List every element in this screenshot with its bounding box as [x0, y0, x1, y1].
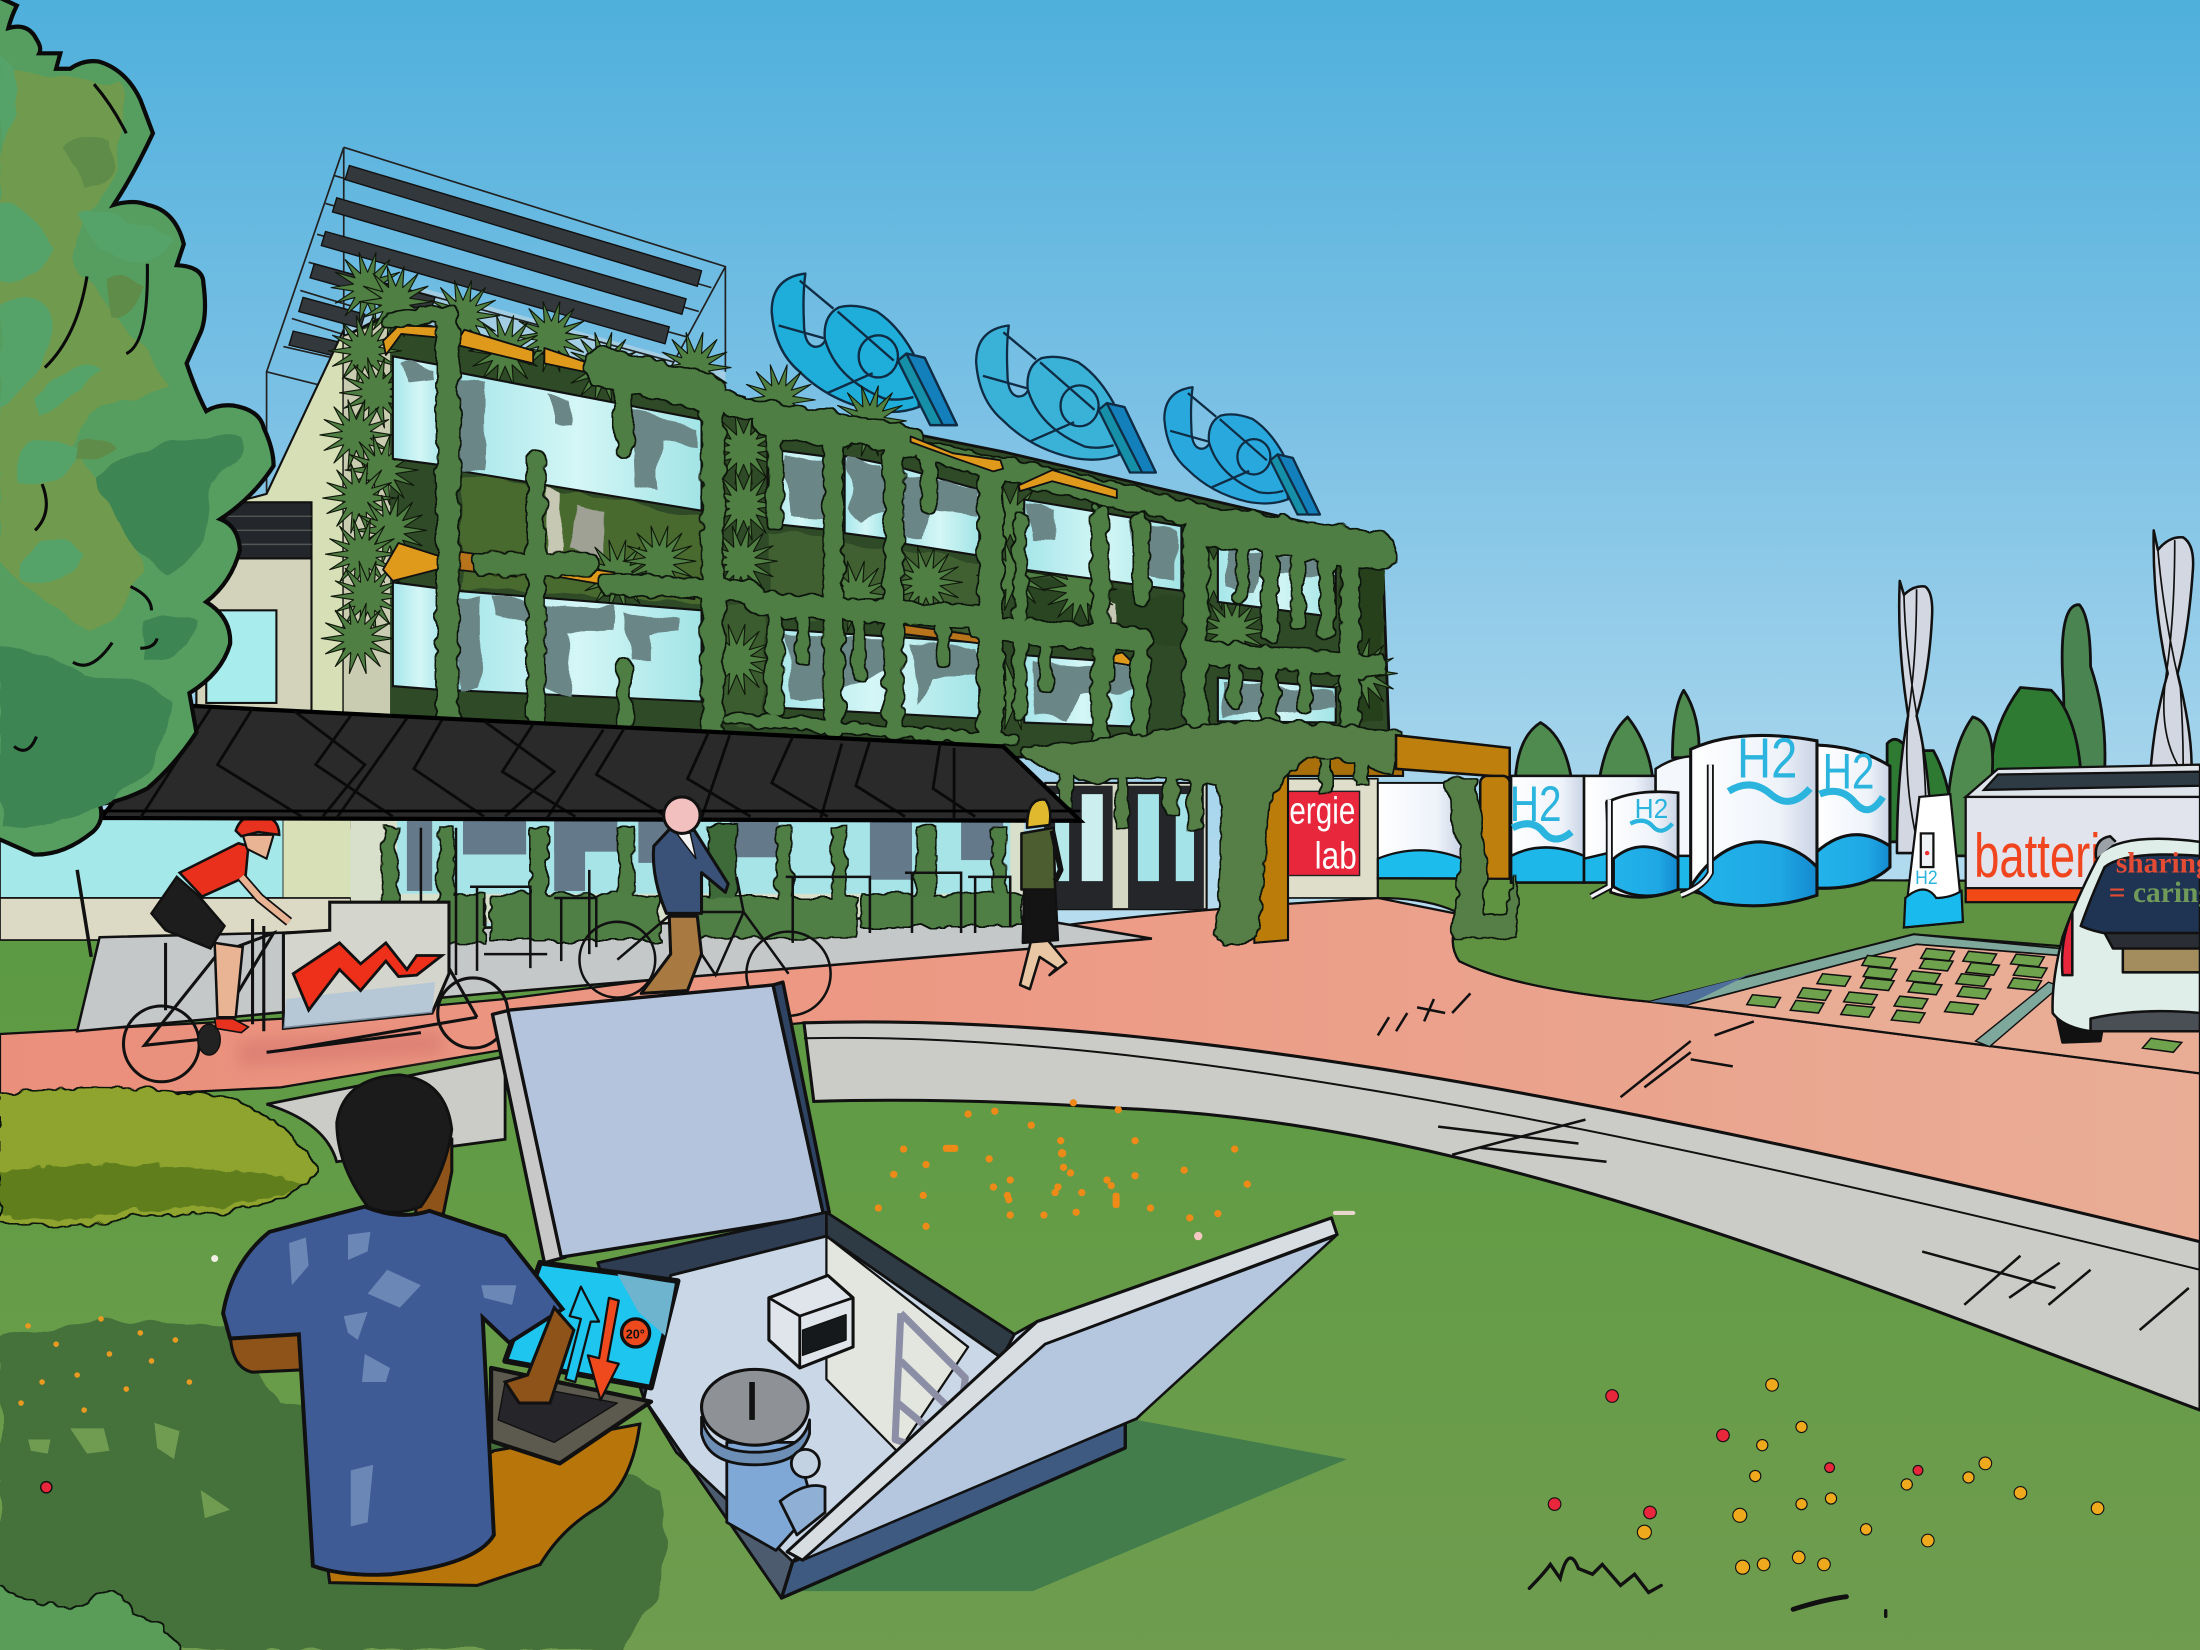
light spots on shaded grass	[28, 1423, 230, 1518]
window shadows	[400, 362, 1333, 718]
neck and face	[415, 1139, 452, 1218]
wind wing 3	[1164, 387, 1320, 515]
brown entrance post	[1254, 741, 1403, 943]
terrace furniture	[421, 828, 1010, 975]
bottom left tree corner	[0, 1583, 182, 1650]
parking grass tiles	[1747, 948, 2182, 1052]
hydrogen tank right	[1817, 743, 1890, 888]
orange planter boxes	[383, 326, 1136, 666]
vine on gate post	[1447, 780, 1517, 937]
palm plants on building	[320, 253, 1397, 730]
hydrogen tank big: H2	[1737, 726, 1797, 789]
entrance doors	[1045, 783, 1207, 909]
green arch over the entrance	[1020, 721, 1400, 944]
awning over the terrace	[77, 706, 1080, 957]
underground hatch interior	[598, 1212, 1037, 1598]
energie lab sign wall: ergie	[1289, 791, 1355, 833]
parked bicycle	[579, 877, 831, 1016]
vertical axis wind turbine left	[1897, 581, 1932, 853]
hydrogen tank small: H2	[1635, 793, 1668, 824]
screen data arrows	[565, 1287, 650, 1400]
lawn base	[0, 926, 2200, 1650]
hydrogen charging totem	[1904, 794, 1963, 927]
hydrogen panel tanks	[1510, 775, 1656, 883]
white shared car	[2053, 836, 2200, 1042]
screen data arrows: 20°	[626, 1328, 645, 1342]
hydrogen tank big	[1681, 726, 1817, 906]
opened front hatch lid	[782, 1218, 1337, 1598]
vertical axis wind turbine right	[2151, 530, 2193, 766]
walking woman	[1020, 800, 1066, 989]
energie lab sign wall	[1287, 779, 1378, 898]
shirt highlights	[289, 1232, 516, 1527]
skin of left arm	[230, 1330, 311, 1372]
grass island behind the path	[1378, 878, 2091, 1002]
pink cycle path	[0, 898, 2200, 1242]
windows upper row	[393, 356, 1336, 617]
ground floor of neighbouring building	[0, 818, 351, 940]
wind wing 2	[976, 326, 1156, 472]
road and path markings	[1378, 993, 2189, 1330]
ground floor window shadows	[407, 821, 1003, 891]
head hair	[337, 1075, 452, 1212]
laptop screen	[505, 1263, 678, 1388]
tall tank behind	[1656, 756, 1692, 890]
grey road	[267, 1022, 2200, 1410]
trousers	[326, 1424, 640, 1585]
ground floor hanging vines and hedge	[390, 825, 1021, 943]
hydrogen tank right: H2	[1823, 743, 1874, 800]
hydrogen tank small	[1591, 792, 1678, 897]
battery container	[1966, 765, 2200, 902]
hydrogen charging totem: H2	[1915, 867, 1938, 889]
black grass scribbles	[1529, 1558, 1886, 1616]
hedge bush	[0, 1089, 320, 1225]
background trees	[1515, 605, 2105, 856]
brown gate	[1396, 735, 1510, 920]
solar panel frame on roof	[267, 147, 725, 494]
battery container: batteri	[1974, 822, 2100, 891]
right forearm	[505, 1308, 574, 1403]
person sitting with laptop	[223, 1075, 678, 1585]
hydrogen panel tanks: H2	[1510, 775, 1562, 832]
sky	[0, 0, 2200, 926]
windows lower row	[393, 582, 1336, 727]
orange planters over vines	[911, 436, 1117, 498]
laptop base	[491, 1368, 651, 1463]
terrace paving	[77, 915, 1152, 1031]
shadow of the open hatch	[796, 1420, 1347, 1591]
cyclist with cargo bike	[123, 815, 508, 1082]
raised hatch lid	[492, 982, 829, 1263]
mottled foliage on facade	[463, 474, 1382, 723]
shirt	[223, 1207, 563, 1575]
white panel with water	[1378, 783, 1462, 878]
soft shadow on path	[239, 1031, 442, 1066]
energie lab sign wall: lab	[1315, 835, 1357, 877]
flowers left of person	[18, 1255, 218, 1493]
parking area	[1650, 934, 2200, 1073]
red and yellow flowers lower right	[1548, 1379, 2104, 1574]
shade under person	[0, 1321, 668, 1650]
walking man	[641, 797, 728, 993]
wind wing 1	[772, 274, 957, 425]
flowers above hatch	[875, 1099, 1355, 1240]
climbing vines covering facade	[390, 311, 1382, 744]
neighbouring building	[196, 330, 351, 828]
main building facade	[344, 316, 1389, 923]
big tree at left	[0, 0, 274, 855]
